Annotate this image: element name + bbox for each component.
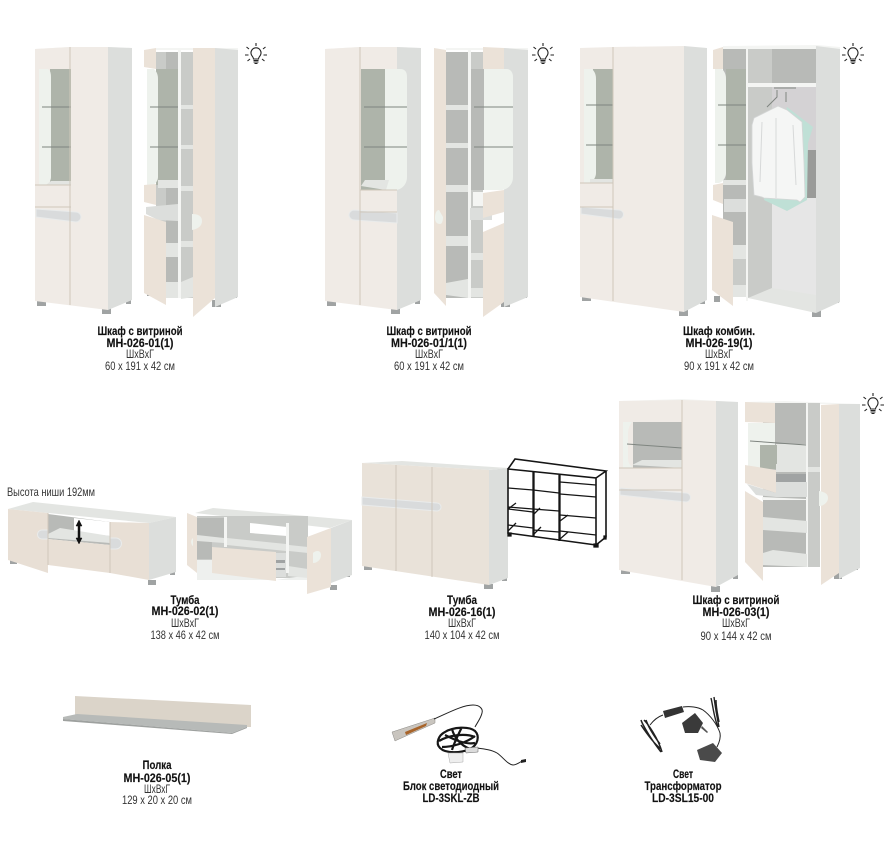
caption: MH-026-16(1) — [424, 593, 500, 642]
product: display cabinet MH-026-01/1(1) — [325, 43, 554, 373]
caption: LD-3SL15-00: Трансформатор — [644, 779, 722, 793]
TV stand open view — [187, 508, 352, 594]
caption: MH-026-19(1): МН-026-19(1) — [686, 336, 752, 350]
LED strip and cable — [392, 705, 526, 765]
caption: MH-026-01/1(1): Шкаф с витриной — [386, 324, 472, 338]
caption: MH-026-01(1): ШхВхГ — [126, 349, 155, 361]
wardrobe closed view — [580, 46, 707, 316]
cabinet open view — [144, 48, 238, 317]
cabinet open view — [745, 401, 860, 585]
caption: LD-3SKL-ZB: LD-3SKL-ZB — [422, 791, 480, 805]
transformer, switch and cable — [641, 697, 722, 762]
arrow: niche height — [76, 520, 82, 544]
caption: MH-026-01/1(1): МН-026-01/1(1) — [391, 336, 467, 350]
caption: MH-026-01(1): Шкаф с витриной — [98, 324, 182, 338]
caption: MH-026-05(1): Полка — [142, 758, 172, 772]
product: TV stand MH-026-02(1) — [7, 485, 352, 642]
chest closed view — [362, 461, 508, 589]
product: wall shelf MH-026-05(1) — [63, 696, 251, 807]
caption: LD-3SKL-ZB — [403, 767, 499, 805]
caption: MH-026-02(1): ШхВхГ — [171, 618, 200, 630]
caption: MH-026-02(1) — [150, 593, 220, 642]
caption: LD-3SKL-ZB: Свет — [440, 767, 462, 781]
caption: LD-3SL15-00 — [644, 767, 722, 805]
caption: LD-3SL15-00: Свет — [673, 767, 693, 781]
icon: light bulb — [862, 393, 884, 414]
TV stand closed view — [8, 502, 176, 585]
caption: MH-026-02(1): 138 х 46 х 42 см — [150, 630, 220, 642]
product: chest of drawers MH-026-16(1) — [362, 459, 606, 642]
caption: MH-026-05(1) — [122, 758, 192, 807]
caption: MH-026-16(1): МН-026-16(1) — [428, 605, 496, 619]
caption: MH-026-01/1(1) — [386, 324, 472, 373]
caption: MH-026-01/1(1): ШхВхГ — [415, 349, 444, 361]
caption: MH-026-05(1): 129 х 20 х 20 см — [122, 795, 192, 807]
icon: light bulb — [842, 43, 864, 64]
caption: MH-026-01(1): 60 х 191 х 42 см — [105, 361, 175, 373]
diagram: wireframe of shelves — [508, 459, 606, 547]
shelf drawing — [63, 696, 251, 734]
product: transformer — [641, 697, 722, 805]
caption: MH-026-03(1): МН-026-03(1) — [702, 605, 770, 619]
product: LED light block — [392, 705, 526, 805]
wardrobe open view — [712, 45, 840, 317]
caption: MH-026-02(1): Тумба — [170, 593, 200, 607]
caption: MH-026-03(1) — [692, 593, 780, 643]
product: display cabinet MH-026-03(1) — [619, 393, 884, 643]
caption: MH-026-01(1) — [98, 324, 182, 373]
caption: MH-026-02(1): МН-026-02(1) — [152, 604, 218, 618]
caption: MH-026-16(1): 140 х 104 х 42 см — [424, 630, 500, 642]
note: niche height: Высота ниши 192мм — [7, 485, 95, 499]
cabinet closed view — [619, 399, 738, 592]
caption: MH-026-01/1(1): 60 х 191 х 42 см — [394, 361, 464, 373]
caption: MH-026-16(1): Тумба — [447, 593, 477, 607]
caption: MH-026-01(1): МН-026-01(1) — [106, 336, 174, 350]
icon: light bulb — [245, 43, 267, 64]
product: display cabinet MH-026-01(1) — [35, 43, 267, 373]
caption: LD-3SKL-ZB: Блок светодиодный — [403, 779, 499, 793]
product: combined wardrobe MH-026-19(1) — [580, 43, 864, 373]
caption: MH-026-03(1): 90 х 144 х 42 см — [700, 631, 772, 643]
icon: light bulb — [532, 43, 554, 64]
caption: MH-026-19(1): ШхВхГ — [705, 349, 734, 361]
caption: LD-3SL15-00: LD-3SL15-00 — [652, 791, 714, 805]
caption: MH-026-03(1): ШхВхГ — [722, 618, 751, 630]
caption: MH-026-19(1): Шкаф комбин. — [683, 324, 755, 338]
cabinet open view — [434, 47, 528, 317]
caption: MH-026-16(1): ШхВхГ — [448, 618, 477, 630]
caption: MH-026-19(1) — [683, 324, 755, 373]
cabinet closed view — [325, 47, 421, 314]
clothes: shirts on a hanger — [752, 90, 813, 211]
caption: MH-026-05(1): ШхВхГ — [144, 784, 171, 796]
caption: MH-026-03(1): Шкаф с витриной — [692, 593, 780, 607]
caption: MH-026-05(1): МН-026-05(1) — [124, 771, 190, 785]
cabinet closed view — [35, 47, 132, 314]
caption: MH-026-19(1): 90 х 191 х 42 см — [684, 361, 754, 373]
